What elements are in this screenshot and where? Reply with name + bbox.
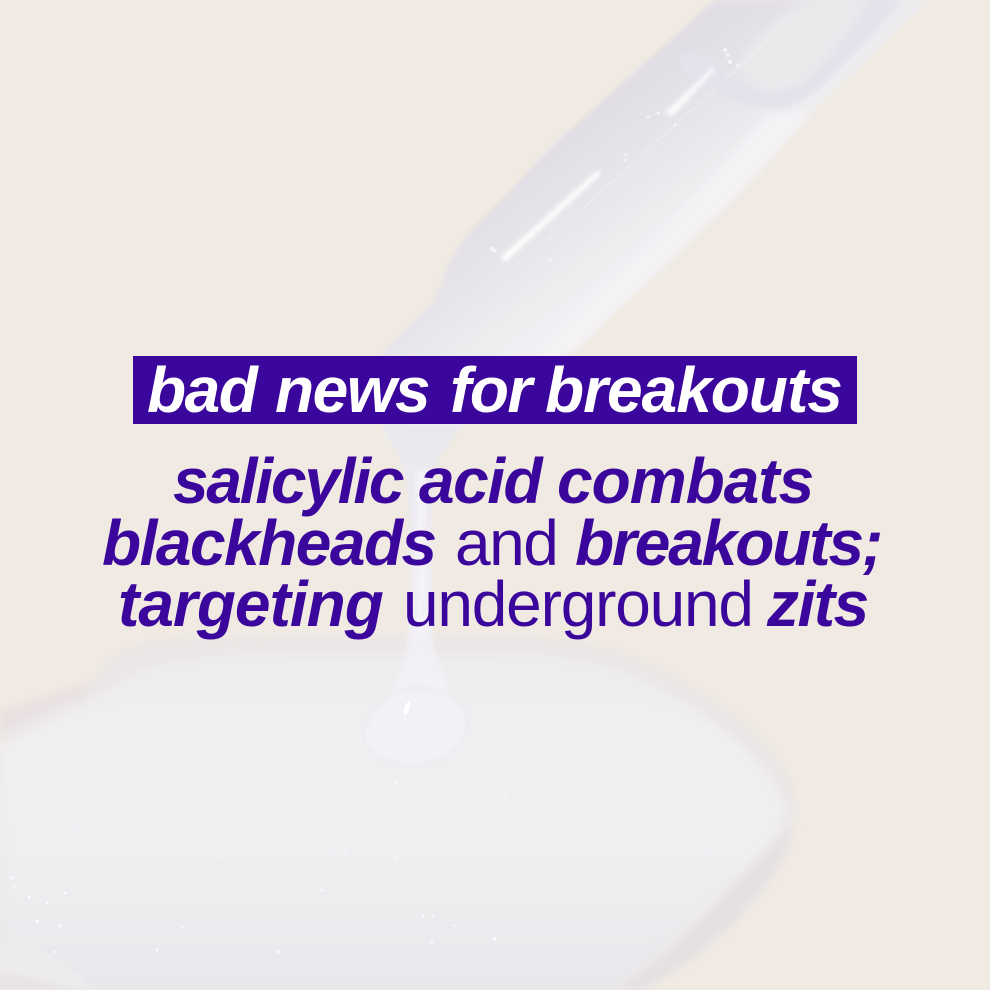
line 1: acid — [419, 445, 541, 517]
line 3: targeting — [118, 568, 383, 640]
pool — [0, 653, 785, 990]
dropper tube — [381, 0, 930, 440]
line 2: and — [455, 507, 557, 579]
line 1: salicylic — [173, 445, 402, 517]
dropper glints — [500, 170, 601, 262]
pool shadow rim — [0, 637, 795, 990]
headline bar — [133, 356, 857, 424]
line 1 — [173, 445, 813, 517]
line 3: underground — [403, 568, 753, 640]
sparkles — [10, 781, 711, 954]
headline text — [147, 354, 842, 426]
line 2: blackheads — [102, 507, 436, 579]
headline text: breakouts — [545, 354, 842, 426]
line 3: zits — [767, 568, 868, 640]
dropper cap ring — [679, 0, 900, 109]
headline text: bad — [147, 354, 256, 426]
line 2: breakouts; — [575, 507, 881, 579]
serum drop — [363, 688, 468, 766]
line 3 — [118, 568, 868, 640]
serum neck and stream — [380, 424, 462, 708]
pool left shadow — [0, 680, 95, 732]
body text — [102, 445, 881, 640]
pool lower right lip — [620, 825, 792, 990]
line 2 — [102, 507, 881, 579]
pool lower left fold — [0, 940, 95, 990]
headline text: news — [275, 354, 429, 426]
headline text: for — [450, 354, 531, 426]
dropper right highlight — [510, 112, 813, 395]
line 1: combats — [557, 445, 813, 517]
